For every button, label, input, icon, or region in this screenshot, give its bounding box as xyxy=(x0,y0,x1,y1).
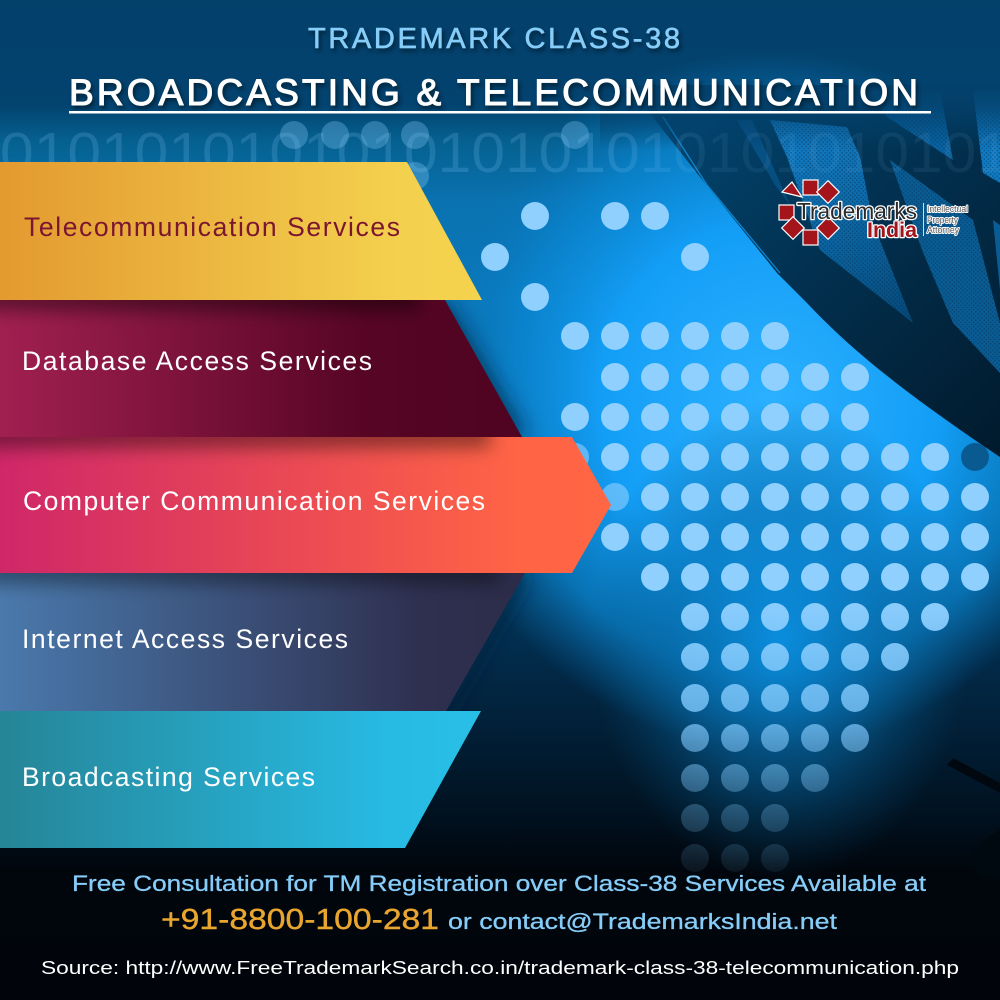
footer: contact line: +91-8800-100-281 xyxy=(161,904,439,936)
satellite dish silhouette xyxy=(600,85,1000,457)
footer: contact line xyxy=(161,904,837,936)
ribbon: Computer Communication Services: Computer Communication Services xyxy=(23,486,485,516)
binary digits backdrop: 010101010101010101010101010101 xyxy=(0,121,1000,185)
icon: red gear blocks xyxy=(779,180,839,245)
ribbon: Internet Access Services: Internet Access Services xyxy=(22,624,348,654)
ribbon: Broadcasting Services xyxy=(0,711,481,848)
footer: contact line: or contact@TrademarksIndia.net xyxy=(448,909,837,934)
dot map of India xyxy=(280,121,989,912)
logo: Trademarks India: Intellectual xyxy=(927,204,968,215)
ribbon: Telecommunication Services xyxy=(0,162,482,300)
ribbon: Broadcasting Services: Broadcasting Services xyxy=(22,762,315,792)
ribbon: Internet Access Services xyxy=(0,561,525,711)
logo: Trademarks India: India xyxy=(867,219,917,242)
shadows behind ribbons xyxy=(420,300,530,711)
ribbon: Database Access Services: Database Access Services xyxy=(22,346,372,376)
footer: consultation line: Free Consultation for TM Registration over Class-38 Services Available at xyxy=(72,871,926,896)
logo: Trademarks India: Property xyxy=(927,215,958,226)
ribbon: Telecommunication Services: Telecommunication Services xyxy=(24,212,400,242)
logo: Trademarks India xyxy=(779,180,968,245)
heading: Broadcasting & Telecommunication: BROADCASTING & TELECOMMUNICATION xyxy=(69,72,918,113)
heading: Trademark Class-38: TRADEMARK CLASS-38 xyxy=(308,23,680,55)
ribbon: Database Access Services xyxy=(0,288,522,437)
logo: Trademarks India: Trademarks xyxy=(797,198,917,224)
dark satellite arm silhouette xyxy=(947,758,1000,880)
ribbon: Computer Communication Services xyxy=(0,425,611,573)
footer: source line: Source: http://www.FreeTrademarkSearch.co.in/trademark-class-38-telecommunication.php xyxy=(41,958,959,978)
logo: Trademarks India: Attorney xyxy=(927,225,959,236)
